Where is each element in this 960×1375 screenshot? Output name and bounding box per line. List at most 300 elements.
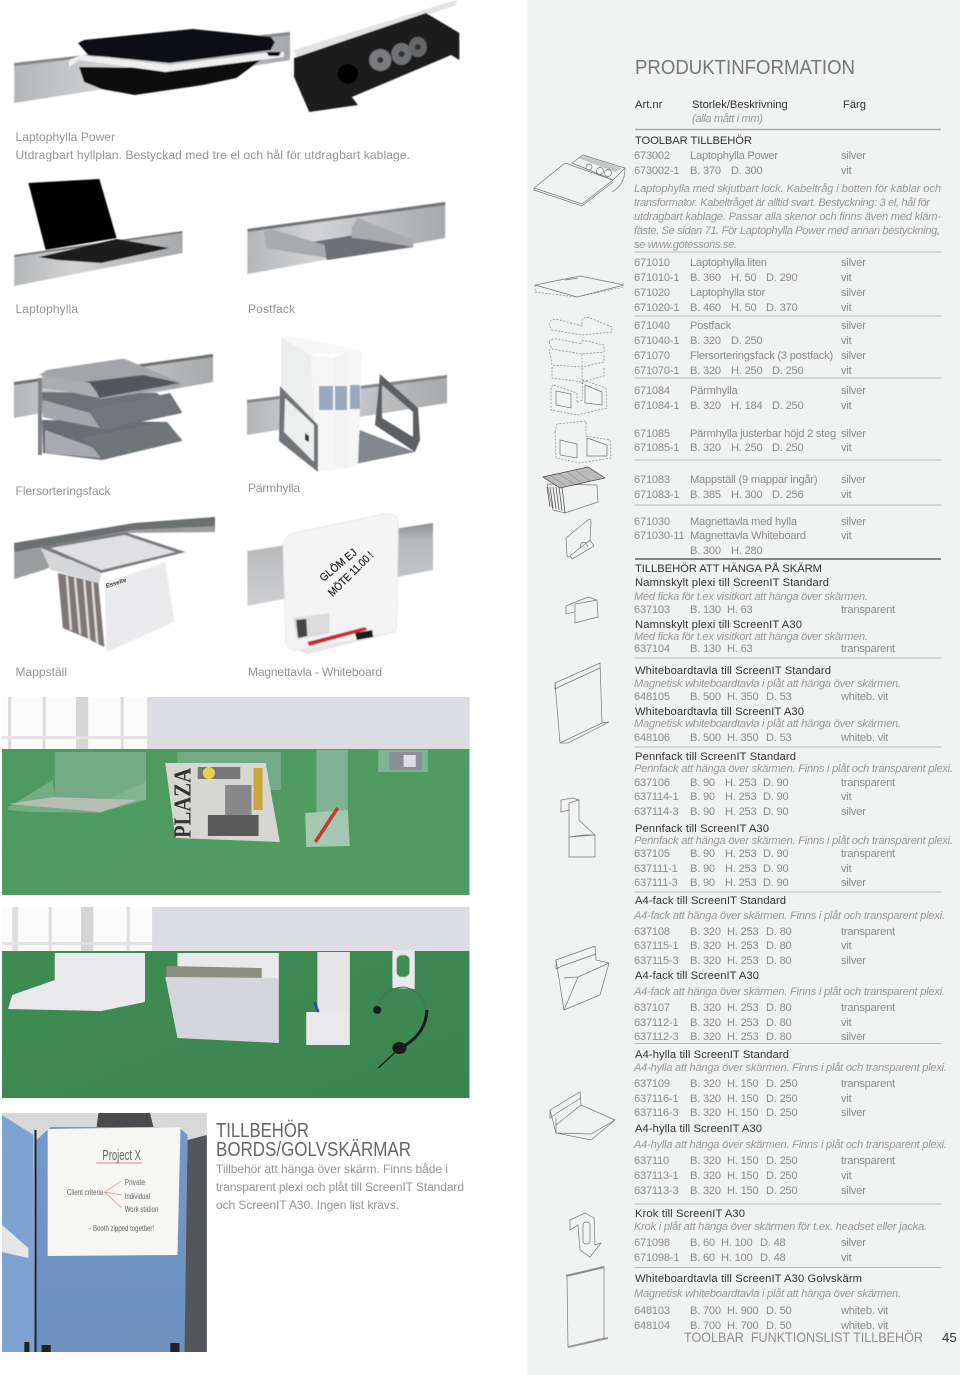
group: A4-fack rows: A4-fack att hänga över skärmen. Finns i plåt och transparent plexi.	[633, 986, 945, 998]
table header	[635, 99, 866, 125]
group: Pennfack rows: vit	[841, 863, 852, 875]
group: A4-fack rows: transparent	[841, 926, 895, 938]
group: A4-fack rows: D. 80	[766, 1031, 792, 1043]
group: Postfack rows: 671040	[634, 320, 670, 332]
group: A4-hylla rows: vit	[841, 1093, 852, 1105]
heading: Tillbehör bords/golvskärmar	[216, 1120, 411, 1161]
group: A4-fack rows: H. 253	[727, 1002, 759, 1014]
plexi shelf	[7, 752, 146, 813]
text block: Tillbehör description: transparent plexi och plåt till ScreenIT Standard	[216, 1180, 464, 1194]
group: Pärmhylla rows: silver	[841, 385, 866, 397]
metal shelf	[8, 953, 145, 1011]
group: A4-fack rows: D. 80	[766, 940, 792, 952]
group: A4-fack rows: silver	[841, 1031, 866, 1043]
heading: Produktinformation: PRODUKTINFORMATION	[635, 56, 855, 79]
group: Pennfack rows: D. 90	[763, 791, 789, 803]
footer title: TOOLBAR FUNKTIONSLIST TILLBEHÖR	[684, 1328, 923, 1345]
caption: Mappställ: Mappställ	[16, 665, 67, 679]
group: Pennfack rows: H. 253	[725, 848, 757, 860]
caption: Magnettavla Whiteboard: Magnettavla - Whiteboard	[248, 665, 382, 679]
photo: Flersorteringsfack	[14, 354, 213, 460]
group: Magnettavla rows: B. 300	[690, 545, 721, 557]
icon: Laptophylla drawing	[535, 276, 624, 297]
photo: Magnettavla whiteboard	[247, 514, 433, 654]
caption: Laptophylla Power: Utdragbart hyllplan. Bestyckad med tre el och hål för utdragbart kablage.	[16, 148, 410, 162]
group: Postfack rows: B. 320	[690, 365, 721, 377]
group: Pärmhylla rows: Pärmhylla	[690, 385, 739, 397]
group: Whiteboardtavla rows: Magnetisk whiteboardtavla i plåt att hänga över skärmen.	[634, 678, 901, 690]
group: Pennfack rows: B. 90	[690, 863, 715, 875]
group: A4-hylla rows: 637110	[634, 1155, 669, 1167]
group: Laptophylla rows: H. 50	[731, 302, 757, 314]
group: Namnskylt rows: transparent	[841, 643, 895, 655]
text block: Tillbehör description: och ScreenIT A30. Ingen list krävs.	[216, 1198, 399, 1212]
group: Laptophylla rows: 671010	[634, 257, 670, 269]
group: Pennfack rows: D. 90	[763, 877, 789, 889]
group: Pennfack rows: vit	[841, 791, 852, 803]
group: A4-hylla rows: B. 320	[690, 1078, 721, 1090]
group: Pennfack rows: Pennfack att hänga över skärmen. Finns i plåt och transparent plexi.	[634, 763, 953, 775]
group: Laptophylla rows: 671010-1	[634, 272, 679, 284]
group: A4-fack rows: B. 320	[690, 955, 721, 967]
group: A4-fack rows: B. 320	[690, 1017, 721, 1029]
group: Namnskylt rows: 637104	[634, 643, 670, 655]
icon: Postfack drawing	[549, 318, 612, 335]
group: Whiteboardtavla Golvskärm rows: whiteb. vit	[840, 1320, 888, 1332]
group: Pennfack rows: D. 90	[763, 777, 789, 789]
group: A4-fack rows: D. 80	[766, 926, 792, 938]
group: Laptophylla Power rows: D. 300	[731, 165, 763, 177]
group: A4-fack rows: D. 80	[766, 1002, 792, 1014]
group: Pennfack rows: B. 90	[690, 848, 715, 860]
group: Laptophylla rows: B. 360	[690, 272, 721, 284]
group: Namnskylt rows: B. 130	[690, 643, 721, 655]
group: Pennfack rows: Pennfack att hänga över skärmen. Finns i plåt och transparent plexi.	[634, 835, 953, 847]
group: A4-fack rows: A4-fack till ScreenIT A30	[635, 970, 759, 982]
group: Laptophylla rows: D. 370	[766, 302, 798, 314]
group: Whiteboardtavla rows: Whiteboardtavla till ScreenIT Standard	[635, 665, 831, 677]
group: A4-fack rows: 637112-3	[634, 1031, 678, 1043]
group: Laptophylla rows	[634, 252, 941, 314]
group: Namnskylt rows: Namnskylt plexi till ScreenIT A30	[635, 619, 802, 631]
group: Pennfack rows: 637106	[634, 777, 670, 789]
group: A4-fack rows: H. 253	[727, 1017, 759, 1029]
group: A4-hylla rows: silver	[841, 1107, 866, 1119]
group: Postfack rows	[634, 316, 941, 377]
group: Krok rows: B. 60	[690, 1237, 715, 1249]
icon: Pärmhylla justerbar drawing	[555, 421, 611, 463]
table header: Färg	[843, 99, 866, 111]
group: A4-hylla rows: D. 250	[766, 1170, 798, 1182]
photo: Magnettavla whiteboard: MÖTE 11.00 !	[326, 550, 376, 599]
page number: 45	[942, 1330, 957, 1345]
group: Krok rows: Krok till ScreenIT A30	[635, 1208, 745, 1220]
plexi pen holder	[305, 750, 350, 847]
group: Pennfack rows: H. 253	[725, 777, 757, 789]
group: Laptophylla rows: 671020	[634, 287, 670, 299]
group: Laptophylla rows: Laptophylla stor	[690, 287, 766, 299]
group: Whiteboardtavla Golvskärm rows: D. 50	[766, 1305, 792, 1317]
group: A4-hylla rows: H. 150	[727, 1185, 759, 1197]
group: Laptophylla rows: silver	[841, 287, 866, 299]
group: Laptophylla Power rows: fäste. Se sidan 71. För Laptophylla Power med annan bestyckning,	[634, 225, 940, 237]
group: Pennfack rows: 637105	[634, 848, 670, 860]
group: Whiteboardtavla Golvskärm rows: H. 900	[727, 1305, 759, 1317]
group: Whiteboardtavla rows: B. 500	[690, 691, 721, 703]
group: A4-hylla rows: H. 150	[727, 1170, 759, 1182]
group: A4-hylla rows: H. 150	[727, 1078, 759, 1090]
group: Pennfack rows: B. 90	[690, 791, 715, 803]
group: Laptophylla Power rows: transformator. Kabeltråget är alltid svart. Bestyckning: 3 el, hål för	[634, 197, 931, 209]
group: Whiteboardtavla Golvskärm rows: whiteb. vit	[840, 1305, 888, 1317]
group: A4-hylla rows: B. 320	[690, 1185, 721, 1197]
group: Whiteboardtavla rows: whiteb. vit	[840, 691, 888, 703]
group: Namnskylt rows: Med ficka för t.ex visitkort att hänga över skärmen.	[634, 591, 868, 603]
group: Krok rows: silver	[841, 1237, 866, 1249]
group: Namnskylt rows: transparent	[841, 604, 895, 616]
group: Pennfack rows: H. 253	[725, 806, 757, 818]
group: Laptophylla Power rows: B. 370	[690, 165, 721, 177]
group: A4-hylla rows: transparent	[841, 1078, 895, 1090]
group: Postfack rows: 671040-1	[634, 335, 679, 347]
group: Laptophylla Power rows: Laptophylla med skjutbart lock. Kabeltråg i botten för kablar och	[634, 183, 941, 195]
handwritten note: GLÖM EJ	[318, 547, 360, 584]
group: A4-fack rows: 637108	[634, 926, 670, 938]
group: Pennfack rows: D. 90	[763, 806, 789, 818]
group: Pärmhylla rows: B. 320	[690, 442, 721, 454]
group: Whiteboardtavla rows	[634, 658, 941, 744]
caption: Laptophylla Power: Laptophylla Power	[16, 130, 115, 144]
heading: Tillbehör bords/golvskärmar: TILLBEHÖR	[216, 1120, 309, 1142]
group: A4-fack rows: B. 320	[690, 926, 721, 938]
group: Postfack rows: B. 320	[690, 335, 721, 347]
heading: Tillbehör bords/golvskärmar: BORDS/GOLVSKÄRMAR	[216, 1139, 411, 1161]
photo: Laptophylla	[14, 179, 183, 286]
group: Krok rows: Krok i plåt att hänga över skärmen för t.ex. headset eller jacka.	[634, 1221, 927, 1233]
group: A4-hylla rows: 637109	[634, 1078, 670, 1090]
caption: Postfack: Postfack	[248, 302, 296, 316]
group: Laptophylla rows: B. 460	[690, 302, 721, 314]
group: A4-fack rows: silver	[841, 955, 866, 967]
group: A4-hylla rows: H. 150	[727, 1107, 759, 1119]
group: A4-hylla rows: vit	[841, 1170, 852, 1182]
group: Laptophylla Power rows: 673002	[634, 150, 670, 162]
photo: Laptophylla Power shelf with laptop	[14, 29, 290, 103]
group: Whiteboardtavla Golvskärm rows: Magnetisk whiteboardtavla i plåt att hänga över skärmen.	[634, 1288, 901, 1300]
group: A4-fack rows	[633, 892, 945, 1043]
group: Namnskylt rows: 637103	[634, 604, 670, 616]
group: A4-fack rows: transparent	[841, 1002, 895, 1014]
group: Pennfack rows: transparent	[841, 777, 895, 789]
icon: A4-fack drawing	[556, 946, 609, 1010]
group: Pennfack rows: D. 90	[763, 848, 789, 860]
icon: Mappställ drawing	[543, 467, 605, 513]
group: A4-hylla rows: 637113-3	[634, 1185, 678, 1197]
group: Laptophylla Power rows: vit	[841, 165, 852, 177]
group: Mappställ rows: vit	[841, 489, 852, 501]
plexi name plate	[378, 750, 428, 772]
group: Mappställ rows: silver	[841, 474, 866, 486]
table header: Storlek/Beskrivning	[692, 99, 788, 111]
group: Pennfack rows: B. 90	[690, 806, 715, 818]
group: Laptophylla rows: 671020-1	[634, 302, 679, 314]
group: A4-hylla rows: B. 320	[690, 1107, 721, 1119]
group: Laptophylla rows: vit	[841, 272, 852, 284]
group: Postfack rows: 671070	[634, 350, 670, 362]
brand on hanging folder: Esselte	[105, 578, 128, 590]
group: A4-fack rows: 637115-1	[634, 940, 678, 952]
icon: Laptophylla Power drawing	[534, 155, 625, 206]
group: Mappställ rows: H. 300	[731, 489, 763, 501]
group: Pärmhylla rows	[634, 378, 941, 454]
caption: Flersorteringsfack: Flersorteringsfack	[16, 484, 112, 498]
group: Postfack rows: silver	[841, 350, 866, 362]
group: Pennfack rows: Pennfack till ScreenIT A30	[635, 823, 769, 835]
group: A4-fack rows: A4-fack att hänga över skärmen. Finns i plåt och transparent plexi.	[633, 910, 945, 922]
paper with handwriting: Individual	[125, 1192, 150, 1201]
table header: Art.nr	[635, 99, 663, 111]
group: Pennfack rows: 637114-3	[634, 806, 678, 818]
group: Mappställ rows: D. 256	[772, 489, 804, 501]
group: A4-fack rows: B. 320	[690, 1002, 721, 1014]
metal hook with headset	[373, 950, 427, 1068]
group: Whiteboardtavla rows: Whiteboardtavla till ScreenIT A30	[635, 706, 804, 718]
group: A4-hylla rows: 637113-1	[634, 1170, 678, 1182]
photo: transparent plexi accessories on green screen	[2, 697, 469, 895]
icon: Namnskylt drawing	[566, 597, 598, 623]
group: A4-hylla rows: B. 320	[690, 1155, 721, 1167]
group: Whiteboardtavla rows: 648105	[634, 691, 670, 703]
group: Laptophylla Power rows: Laptophylla Power	[690, 150, 778, 162]
metal magazine holder	[165, 953, 279, 1043]
group: Postfack rows: vit	[841, 335, 852, 347]
group: Mappställ rows: 671083-1	[634, 489, 679, 501]
group: Namnskylt rows: B. 130	[690, 604, 721, 616]
text block: Tillbehör description: Tillbehör att hänga över skärm. Finns både i	[216, 1162, 448, 1176]
icon: Flersorteringsfack drawing	[549, 339, 604, 385]
group: Namnskylt rows: TILLBEHÖR ATT HÄNGA PÅ SKÄRM	[635, 562, 822, 575]
group: Pennfack rows: B. 90	[690, 777, 715, 789]
group: A4-fack rows: 637107	[634, 1002, 670, 1014]
caption: Pärmhylla: Pärmhylla	[248, 481, 300, 495]
group: Laptophylla Power rows: TOOLBAR TILLBEHÖR	[635, 135, 752, 147]
plexi magazine holder with magazine: PLAZA	[169, 768, 197, 838]
group: Mappställ rows	[634, 460, 941, 501]
group: A4-fack rows: D. 80	[766, 1017, 792, 1029]
group: Whiteboardtavla rows: whiteb. vit	[840, 732, 888, 744]
photo: Pärmhylla	[247, 335, 447, 472]
group: Pärmhylla rows: vit	[841, 400, 852, 412]
group: Pärmhylla rows: D. 250	[772, 442, 804, 454]
paper with handwriting: Private	[125, 1178, 145, 1187]
group: A4-hylla rows: D. 250	[766, 1078, 798, 1090]
icon: Whiteboardtavla Golvskärm drawing	[566, 1267, 608, 1347]
caption: Laptophylla Power	[16, 130, 410, 162]
icon: Whiteboardtavla drawing	[555, 663, 609, 743]
group: Pennfack rows: Pennfack till ScreenIT Standard	[635, 751, 796, 763]
group: Laptophylla rows: silver	[841, 257, 866, 269]
group: Pärmhylla rows: 671085	[634, 428, 670, 440]
photo: Laptophylla Power sockets	[294, 0, 459, 112]
group: Laptophylla Power rows: silver	[841, 150, 866, 162]
group: A4-hylla rows: silver	[841, 1185, 866, 1197]
group: Magnettavla rows	[634, 505, 941, 557]
table header: (alla mått i mm)	[692, 113, 763, 125]
group: A4-fack rows: B. 320	[690, 1031, 721, 1043]
group: Pennfack rows: 637114-1	[634, 791, 678, 803]
group: A4-fack rows: vit	[841, 1017, 852, 1029]
icon: Krok drawing	[570, 1213, 601, 1257]
group: A4-hylla rows: D. 250	[766, 1185, 798, 1197]
group: Namnskylt rows: Namnskylt plexi till ScreenIT Standard	[635, 577, 829, 589]
paper with handwriting: Work station	[125, 1205, 158, 1214]
group: Whiteboardtavla rows: 648106	[634, 732, 670, 744]
group: Pärmhylla rows: 671084-1	[634, 400, 679, 412]
group: Pennfack rows: B. 90	[690, 877, 715, 889]
group: Krok rows: H. 100	[721, 1237, 753, 1249]
group: Pennfack rows: silver	[841, 877, 866, 889]
group: A4-hylla rows: A4-hylla att hänga över skärmen. Finns i plåt och transparent plexi.	[633, 1062, 947, 1074]
group: A4-hylla rows: D. 250	[766, 1155, 798, 1167]
group: A4-fack rows: H. 253	[727, 1031, 759, 1043]
panel: product information background	[527, 0, 960, 1375]
group: Namnskylt rows: H. 63	[727, 643, 753, 655]
group: Whiteboardtavla rows: Magnetisk whiteboardtavla i plåt att hänga över skärmen.	[634, 718, 901, 730]
group: Krok rows: vit	[841, 1252, 852, 1264]
plexi magazine holder with magazine	[165, 752, 281, 842]
group: Postfack rows: D. 250	[772, 365, 804, 377]
group: Whiteboardtavla Golvskärm rows	[634, 1268, 941, 1332]
group: Pärmhylla rows: D. 250	[772, 400, 804, 412]
group: Magnettavla rows: Magnettavla med hylla	[690, 516, 798, 528]
group: A4-fack rows: 637115-3	[634, 955, 678, 967]
group: A4-hylla rows: 637116-3	[634, 1107, 678, 1119]
group: A4-fack rows: H. 253	[727, 926, 759, 938]
group: Namnskylt rows	[634, 559, 941, 655]
group: Whiteboardtavla Golvskärm rows: B. 700	[690, 1320, 721, 1332]
group: Krok rows: D. 48	[760, 1237, 786, 1249]
group: Laptophylla rows: vit	[841, 302, 852, 314]
group: Pärmhylla rows: 671084	[634, 385, 670, 397]
photo: white metal accessories on green screen	[2, 907, 469, 1098]
group: Pärmhylla rows: 671085-1	[634, 442, 679, 454]
group: A4-hylla rows: D. 250	[766, 1093, 798, 1105]
group: A4-fack rows: D. 80	[766, 955, 792, 967]
group: Pärmhylla rows: silver	[841, 428, 866, 440]
group: Pennfack rows: H. 253	[725, 877, 757, 889]
group: Postfack rows: D. 250	[731, 335, 763, 347]
group: Pennfack rows: D. 90	[763, 863, 789, 875]
group: Pennfack rows: H. 253	[725, 863, 757, 875]
group: Whiteboardtavla Golvskärm rows: Whiteboardtavla till ScreenIT A30 Golvskärm	[635, 1273, 862, 1285]
group: Postfack rows: vit	[841, 365, 852, 377]
group: Krok rows: 671098	[634, 1237, 670, 1249]
group: Postfack rows: Postfack	[690, 320, 732, 332]
paper with handwriting: Client criteria	[67, 1188, 104, 1197]
group: Whiteboardtavla rows: H. 350	[727, 732, 759, 744]
group: Pärmhylla rows: B. 320	[690, 400, 721, 412]
group: Pennfack rows	[634, 747, 953, 889]
group: Postfack rows: silver	[841, 320, 866, 332]
paper with handwriting	[48, 1127, 180, 1256]
group: Laptophylla rows: H. 50	[731, 272, 757, 284]
group: Postfack rows: H. 250	[731, 365, 763, 377]
text block: Tillbehör description	[216, 1162, 464, 1212]
group: Laptophylla Power rows: se www.gotessons.se.	[634, 239, 737, 251]
group: Pärmhylla rows: vit	[841, 442, 852, 454]
group: Whiteboardtavla Golvskärm rows: 648103	[634, 1305, 670, 1317]
group: Magnettavla rows: silver	[841, 516, 866, 528]
photo: Mappställ	[14, 517, 215, 652]
icon: Magnettavla drawing	[566, 519, 594, 559]
group: A4-hylla rows: transparent	[841, 1155, 895, 1167]
paper with handwriting: Project X	[102, 1147, 141, 1164]
group: A4-hylla rows: H. 150	[727, 1093, 759, 1105]
group: Mappställ rows: 671083	[634, 474, 670, 486]
group: Pennfack rows: H. 253	[725, 791, 757, 803]
group: Mappställ rows: Mappställ (9 mappar ingår)	[690, 474, 817, 486]
group: Whiteboardtavla rows: D. 53	[766, 732, 792, 744]
group: Magnettavla rows: Magnettavla Whiteboard	[690, 530, 806, 542]
group: A4-hylla rows: B. 320	[690, 1093, 721, 1105]
group: Krok rows: B. 60	[690, 1252, 715, 1264]
group: Postfack rows: 671070-1	[634, 365, 679, 377]
group: Mappställ rows: B. 385	[690, 489, 721, 501]
group: Pennfack rows: silver	[841, 806, 866, 818]
group: A4-hylla rows	[633, 1044, 947, 1197]
group: A4-hylla rows: A4-hylla till ScreenIT Standard	[635, 1049, 789, 1061]
group: Krok rows: D. 48	[760, 1252, 786, 1264]
group: Magnettavla rows: vit	[841, 530, 852, 542]
group: A4-fack rows: vit	[841, 940, 852, 952]
group: Whiteboardtavla Golvskärm rows: H. 700	[727, 1320, 759, 1332]
group: Whiteboardtavla rows: B. 500	[690, 732, 721, 744]
group: Magnettavla rows: 671030-11	[634, 530, 684, 542]
group: A4-hylla rows: B. 320	[690, 1170, 721, 1182]
group: Pennfack rows: 637111-1	[634, 863, 678, 875]
group: A4-hylla rows: 637116-1	[634, 1093, 678, 1105]
group: Whiteboardtavla Golvskärm rows: 648104	[634, 1320, 670, 1332]
group: Laptophylla Power rows	[634, 130, 941, 251]
group: A4-hylla rows: A4-hylla att hänga över skärmen. Finns i plåt och transparent plexi.	[633, 1139, 947, 1151]
group: Magnettavla rows: H. 280	[731, 545, 763, 557]
group: A4-fack rows: H. 253	[727, 940, 759, 952]
group: A4-hylla rows: D. 250	[766, 1107, 798, 1119]
paper with handwriting: - Booth zipped together!	[89, 1224, 154, 1233]
group: Krok rows: H. 100	[721, 1252, 753, 1264]
photo: whiteboard on blue floor screen	[2, 1113, 207, 1352]
group: A4-hylla rows: H. 150	[727, 1155, 759, 1167]
group: A4-fack rows: 637112-1	[634, 1017, 678, 1029]
group: Namnskylt rows: H. 63	[727, 604, 753, 616]
group: A4-hylla rows: A4-hylla till ScreenIT A30	[635, 1123, 762, 1135]
icon: A4-hylla drawing	[550, 1092, 615, 1140]
metal pen holder	[306, 952, 350, 1045]
icon: Pennfack drawing	[561, 798, 595, 857]
group: Postfack rows: Flersorteringsfack (3 postfack)	[690, 350, 833, 362]
group: Pärmhylla rows: Pärmhylla justerbar höjd 2 steg	[690, 428, 836, 440]
group: Magnettavla rows: 671030	[634, 516, 670, 528]
group: Laptophylla rows: D. 290	[766, 272, 798, 284]
group: Pennfack rows: transparent	[841, 848, 895, 860]
group: Whiteboardtavla rows: D. 53	[766, 691, 792, 703]
group: Pärmhylla rows: H. 250	[731, 442, 763, 454]
group: Laptophylla Power rows: utdragbart kablage. Passar alla skenor och finns även med kläm-	[634, 211, 941, 223]
group: Krok rows: 671098-1	[634, 1252, 679, 1264]
group: Whiteboardtavla Golvskärm rows: D. 50	[766, 1320, 792, 1332]
group: Pennfack rows: 637111-3	[634, 877, 678, 889]
group: A4-fack rows: H. 253	[727, 955, 759, 967]
